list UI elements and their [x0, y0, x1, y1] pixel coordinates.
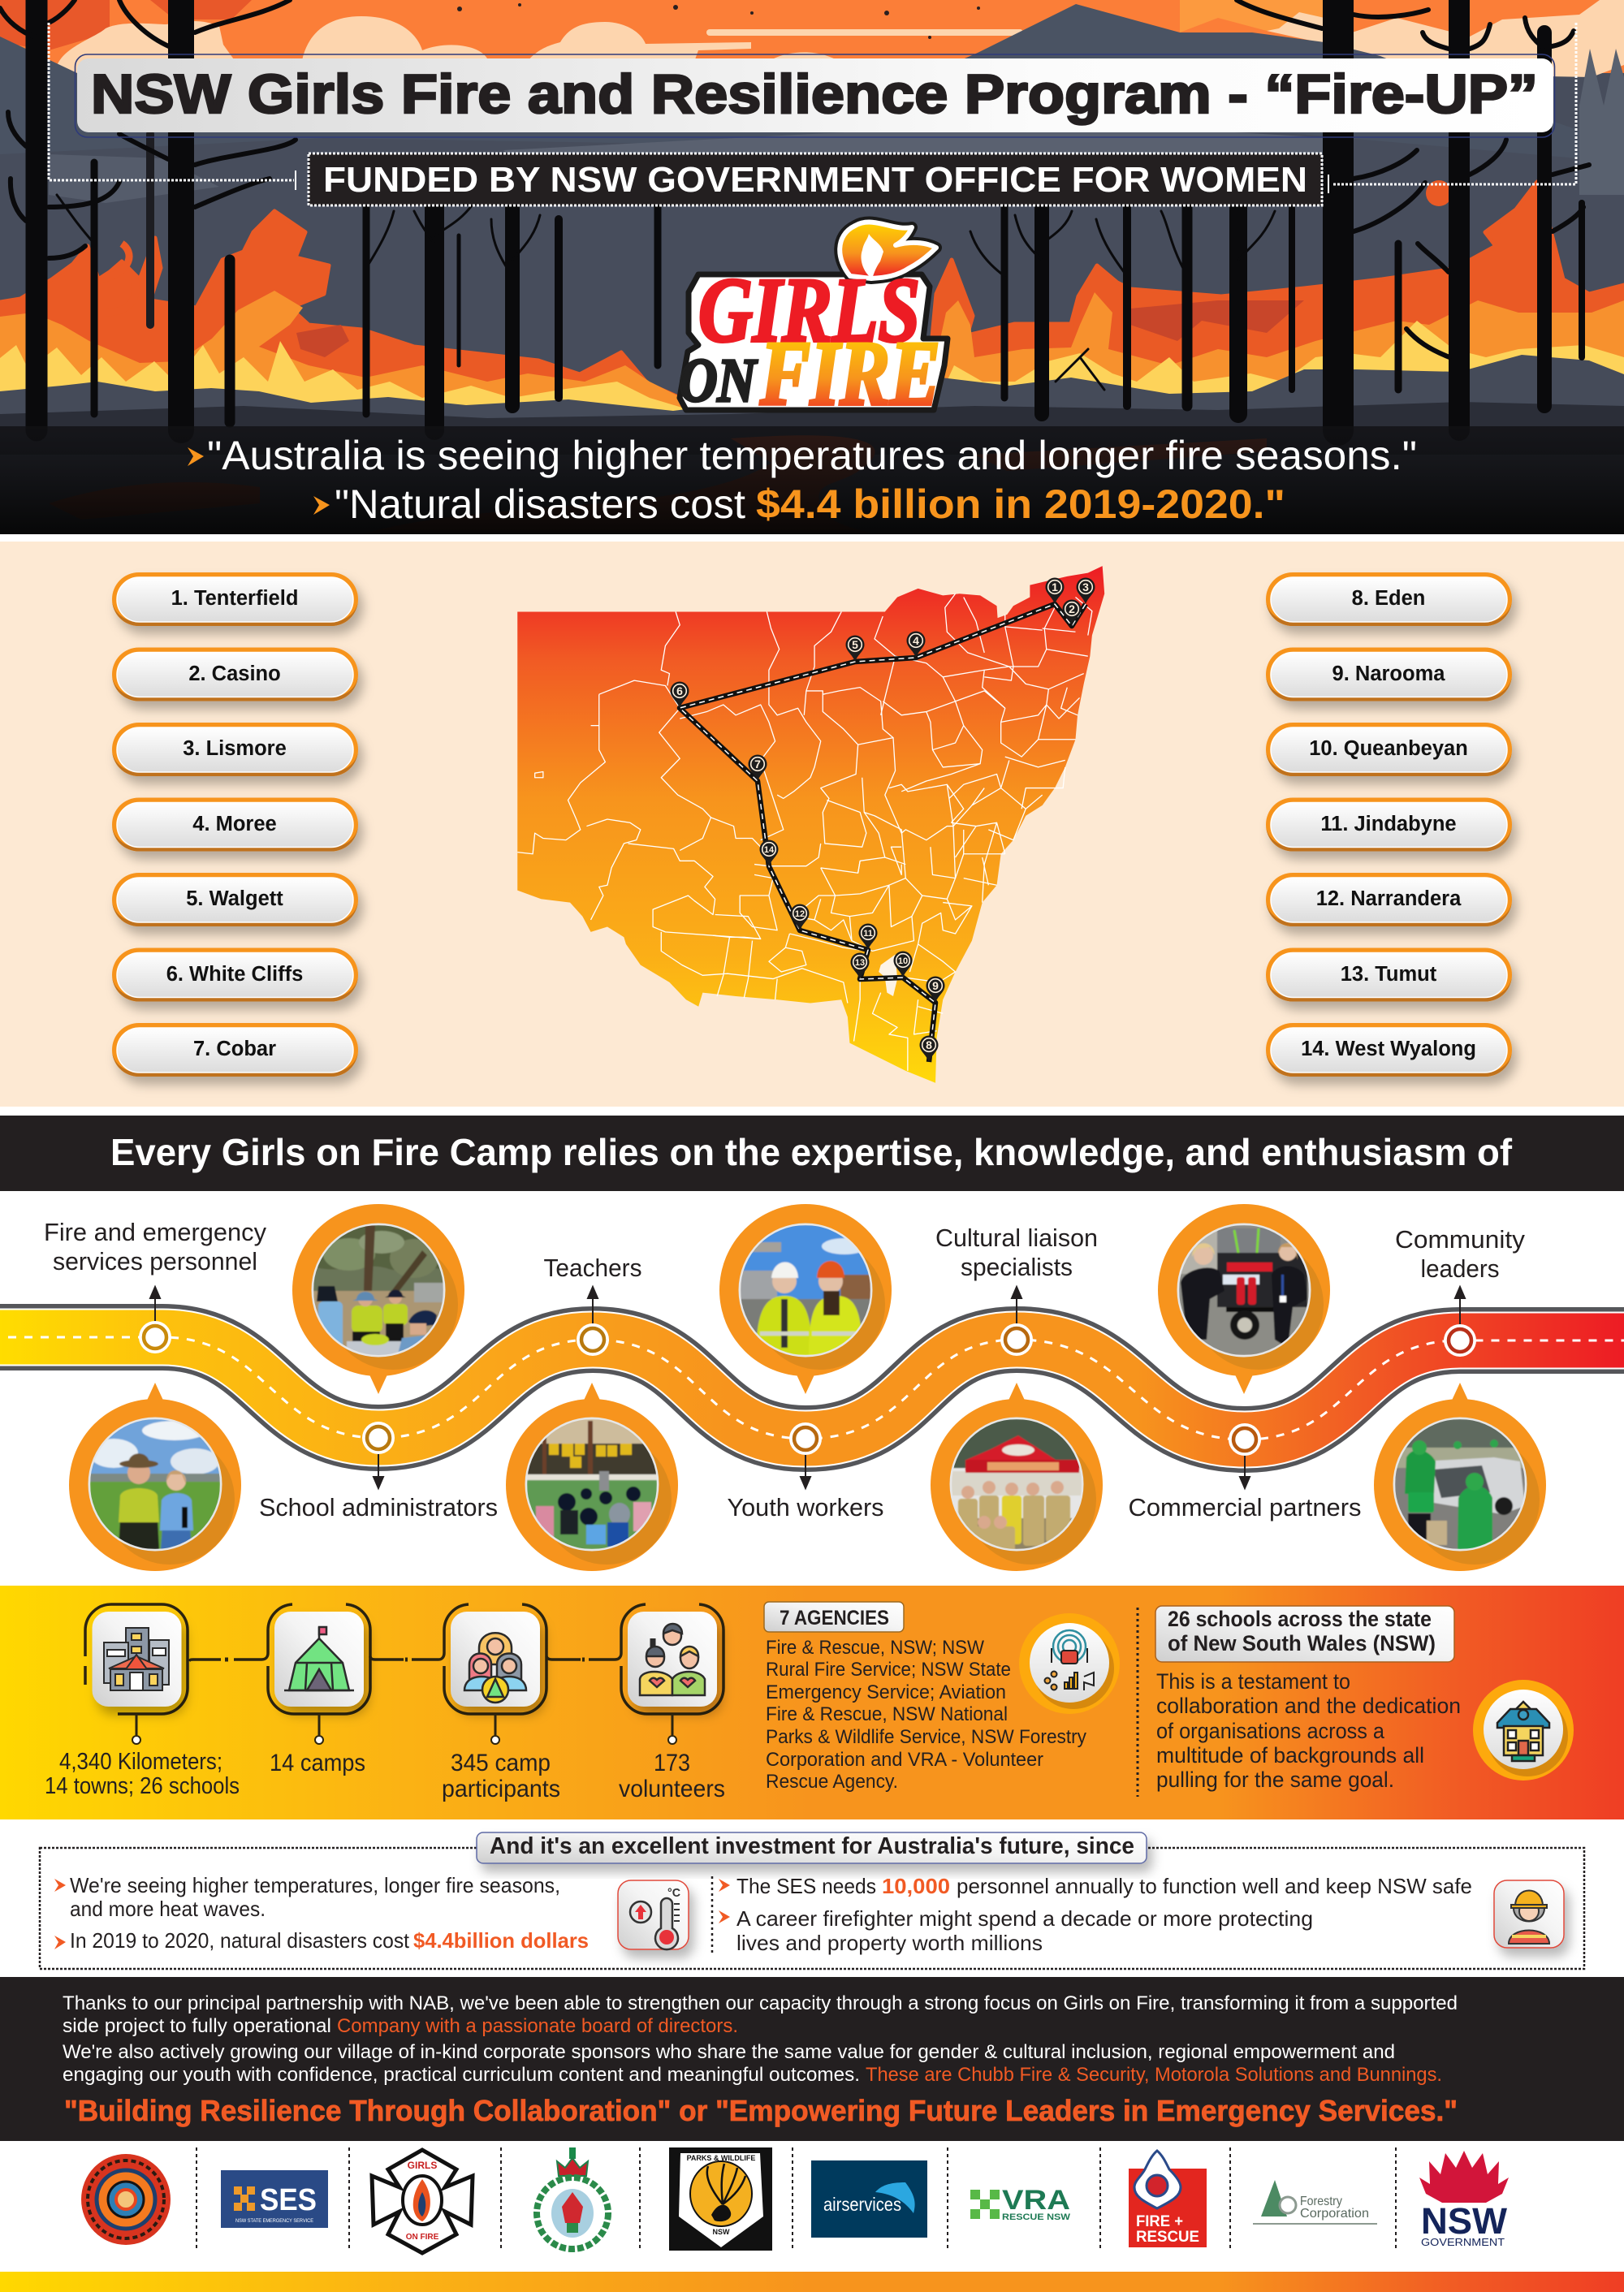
label: school administrators: School administrators [259, 1493, 498, 1522]
pin 4 [906, 632, 926, 658]
schools paragraph: pulling for the same goal. [1156, 1768, 1394, 1792]
pill: Queanbeyan: 10. Queanbeyan [1309, 737, 1468, 760]
pin 8 [919, 1036, 939, 1062]
caption line 1: "Australia is seeing higher temperatures and longer fire seasons." [207, 433, 1417, 478]
sky [0, 0, 1624, 73]
label: camps: 14 camps [270, 1750, 365, 1776]
label: participants count: 345 camp [451, 1750, 551, 1776]
logo: SES: SES [260, 2183, 317, 2217]
icon: school [1473, 1680, 1574, 1781]
partnership panel [0, 1977, 1624, 2141]
photo pin: two people on oval [69, 1383, 241, 1571]
agencies list: Rescue Agency. [766, 1771, 898, 1793]
investment text right [719, 1874, 1472, 1955]
partnership paragraph 1: Thanks to our principal partnership with NAB, we've been able to strengthen our capacity through a strong focus on Girls on Fire, transforming it from a supported [63, 1992, 1458, 2014]
pill: West Wyalong: 14. West Wyalong [1301, 1038, 1476, 1060]
icon: thermometer: °C [667, 1886, 680, 1900]
logo word ON: ON [679, 347, 758, 415]
pin 1 [1046, 578, 1064, 604]
spruce trees right [1579, 49, 1624, 195]
bullet [54, 1936, 66, 1949]
NSW map with tour route [517, 566, 1104, 1083]
icon: firefighter [1494, 1880, 1564, 1948]
caption line 2: "Natural disasters cost [335, 481, 745, 527]
logo: VRA rescue [970, 2185, 1071, 2222]
river of embers [86, 435, 1267, 494]
bullet [719, 1879, 730, 1892]
label: volunteers: volunteers [619, 1776, 725, 1802]
caption line 2: $4.4 billion in 2019-2020." [756, 481, 1285, 527]
pill: Moree: 4. Moree [192, 813, 277, 835]
pin 9: 9 [932, 979, 939, 992]
pin 8: 8 [926, 1038, 932, 1051]
paragraph 1 line 2: side project to fully operational [63, 2015, 331, 2037]
label line 2: services personnel [53, 1247, 257, 1275]
pill: Tenterfield: 1. Tenterfield [171, 587, 298, 610]
logo dividers [197, 2147, 1396, 2251]
icon: city buildings [104, 1628, 169, 1690]
pill: Lismore: 3. Lismore [183, 737, 287, 760]
logo: rural fire service [537, 2147, 608, 2249]
icon: communication [1019, 1613, 1120, 1714]
winding road [0, 1337, 1624, 1440]
pill: Jindabyne [1266, 797, 1512, 851]
schools label: of New South Wales (NSW) [1168, 1631, 1436, 1655]
highlight: company: Company with a passionate board of directors. [337, 2015, 738, 2037]
pill: Narooma: 9. Narooma [1332, 663, 1445, 685]
label: teachers: Teachers [544, 1254, 641, 1282]
agencies list: Parks & Wildlife Service, NSW Forestry [766, 1726, 1086, 1748]
logo: national parks: NSW [713, 2228, 730, 2236]
pin 5: 5 [852, 638, 858, 651]
title banner [75, 54, 1554, 137]
agencies list: Rural Fire Service; NSW State [766, 1659, 1011, 1681]
pin 14 [760, 840, 778, 866]
pill: White Cliffs: 6. White Cliffs [166, 963, 303, 986]
pill: Walgett [112, 873, 358, 926]
pin 4: 4 [913, 634, 919, 647]
stem [318, 1714, 320, 1735]
stem [135, 1714, 138, 1735]
label: fire and emergency services personnel: Fire and emergency [44, 1218, 266, 1246]
logo: fire and rescue: RESCUE [1136, 2229, 1199, 2246]
pill: West Wyalong [1266, 1023, 1512, 1077]
stat: kilometers [45, 1604, 240, 1799]
pill: Tenterfield [112, 572, 358, 626]
label line 2: specialists [961, 1253, 1073, 1281]
stem dot [315, 1736, 323, 1744]
road waypoint markers [139, 1321, 1476, 1456]
pin 2: 2 [1069, 602, 1075, 615]
highlight: 10,000: 10,000 [882, 1874, 950, 1898]
stats band [0, 1586, 1624, 1819]
pill: Tumut: 13. Tumut [1341, 963, 1437, 986]
bullet [719, 1910, 730, 1923]
stat: volunteers [619, 1604, 725, 1802]
schools paragraph: multitude of backgrounds all [1156, 1743, 1424, 1768]
schools paragraph: collaboration and the dedication [1156, 1694, 1461, 1718]
logo outline plate [680, 274, 948, 410]
point: SES personnel: The SES needs [736, 1874, 876, 1898]
stat connectors [189, 1653, 621, 1661]
funding subtitle box: FUNDED BY NSW GOVERNMENT OFFICE FOR WOMEN [323, 160, 1307, 200]
agencies label [764, 1602, 904, 1632]
pill: Eden [1266, 572, 1512, 626]
point continued: and more heat waves. [70, 1897, 266, 1921]
caption line 2 [313, 481, 1285, 527]
logo: forestry corporation: Corporation [1300, 2207, 1369, 2221]
logo: VRA rescue: RESCUE NSW [1002, 2212, 1071, 2222]
dark caption band [0, 426, 1624, 534]
label: kilometers: 4,340 Kilometers; [59, 1749, 222, 1775]
label line 2: leaders [1421, 1254, 1499, 1283]
photo pin: two women with trailer [1158, 1204, 1330, 1394]
label: volunteers count: 173 [654, 1750, 690, 1776]
paragraph 2 line 2: engaging our youth with confidence, practical curriculum content and meaningful outcomes. [63, 2064, 860, 2086]
schools label: 26 schools across the state [1168, 1607, 1432, 1631]
pill: Cobar: 7. Cobar [193, 1038, 276, 1060]
schools paragraph: of organisations across a [1156, 1719, 1385, 1743]
highlight: sponsors: These are Chubb Fire & Security, Motorola Solutions and Bunnings. [866, 2064, 1442, 2086]
label: cultural liaison specialists: Cultural liaison [935, 1224, 1098, 1252]
pin 12: 12 [795, 909, 805, 919]
ground [0, 355, 1624, 418]
agencies list: Fire & Rescue, NSW National [766, 1703, 1008, 1725]
stem dot [491, 1736, 499, 1744]
logo: national parks: PARKS & WILDLIFE [687, 2154, 755, 2162]
pin 6 [671, 682, 689, 708]
tour route line [680, 604, 1086, 1062]
point continued: lives and property worth millions [736, 1931, 1043, 1955]
closing slogan: "Building Resilience Through Collaboration" or "Empowering Future Leaders in Emergency Services." [64, 2094, 1458, 2127]
pin 6: 6 [676, 684, 683, 697]
pin 9 [926, 976, 945, 1003]
pill: White Cliffs [112, 948, 358, 1002]
agencies list: Fire & Rescue, NSW; NSW [766, 1637, 984, 1659]
investment text left [54, 1873, 589, 1953]
pin 2 [1062, 599, 1082, 626]
location pins [671, 578, 1095, 1062]
birds [457, 3, 980, 39]
pill: Moree [112, 797, 358, 851]
pin 3: 3 [1082, 581, 1089, 594]
Girls on Fire logo [679, 222, 948, 425]
pin 11: 11 [863, 929, 873, 939]
pill: Casino [112, 648, 358, 701]
logo: forestry corporation: Forestry [1300, 2195, 1342, 2208]
flames: back layer [0, 180, 1624, 422]
photo pin: group under red gazebo [931, 1383, 1103, 1571]
point: disaster cost: In 2019 to 2020, natural disasters cost [70, 1928, 410, 1953]
map section background [0, 542, 1624, 1107]
logo: Girls on Fire cross [372, 2150, 473, 2253]
stat: camps [268, 1604, 370, 1776]
photo pin: rescue crew at crashed car [1374, 1383, 1546, 1571]
partnership paragraph 2: We're also actively growing our village of in-kind corporate sponsors who share the same value for gender & cultural inclusion, regional empowerment and [63, 2041, 1395, 2063]
schools paragraph: This is a testament to [1156, 1669, 1350, 1694]
logo: fire and rescue: FIRE + [1136, 2213, 1183, 2230]
logo: VRA rescue: VRA [1002, 2185, 1070, 2216]
logo: SES [221, 2170, 328, 2228]
pin 7 [749, 755, 767, 781]
pill: Narrandera [1266, 873, 1512, 926]
pin 11 [859, 924, 877, 950]
icon: thermometer [618, 1880, 689, 1949]
label: youth workers: Youth workers [728, 1493, 883, 1522]
logo: NSW government: GOVERNMENT [1421, 2236, 1505, 2248]
photo pin: assembled school students [506, 1383, 678, 1571]
mountains [0, 4, 1387, 73]
logo word GIRLS: GIRLS [698, 260, 920, 361]
dotted frame around title [49, 23, 1576, 193]
clouds [55, 0, 1624, 77]
logo: airservices: airservices [823, 2194, 901, 2215]
schools label [1155, 1606, 1454, 1662]
pill: Walgett: 5. Walgett [186, 887, 283, 910]
pin 13: 13 [855, 958, 865, 968]
pill: Cobar [112, 1023, 358, 1077]
label: towns and schools: 14 towns; 26 schools [45, 1773, 240, 1799]
pill: Tumut [1266, 948, 1512, 1002]
title banner: NSW Girls Fire and Resilience Program - “Fire-UP” [91, 63, 1538, 125]
pin 14: 14 [764, 845, 775, 855]
pill: Narrandera: 12. Narrandera [1316, 887, 1462, 910]
26 schools panel [1155, 1606, 1574, 1792]
section heading: every camp relies on [0, 1116, 1624, 1191]
logo: SES: NSW STATE EMERGENCY SERVICE [235, 2219, 313, 2224]
logo: national parks [669, 2147, 772, 2251]
stem [494, 1714, 497, 1735]
stem dot [668, 1736, 676, 1744]
pin 1: 1 [1052, 581, 1058, 594]
footer gradient band [0, 2272, 1624, 2292]
logo: indigenous artwork [81, 2154, 171, 2245]
pin 10 [893, 952, 913, 978]
pin 5 [846, 635, 864, 662]
label: participants: participants [442, 1776, 560, 1802]
section heading: every camp relies on: Every Girls on Fire Camp relies on the expertise, knowledge, and enthusiasm of [110, 1131, 1513, 1173]
highlight: cost amount: $4.4billion dollars [413, 1928, 589, 1953]
bullet [54, 1879, 66, 1892]
7 agencies panel [764, 1602, 1120, 1793]
agencies list: Emergency Service; Aviation [766, 1681, 1006, 1703]
pin 13 [851, 953, 869, 979]
logo word FIRE: FIRE [759, 323, 940, 425]
road labels [44, 1218, 1526, 1522]
icon: volunteers group [640, 1624, 705, 1695]
label: commercial partners: Commercial partners [1129, 1493, 1361, 1522]
stat: participants [442, 1604, 560, 1802]
stem [671, 1714, 674, 1735]
pill: Lismore [112, 723, 358, 776]
header: bushfire illustration banner [0, 0, 1624, 536]
logo: NSW government: NSW [1421, 2200, 1508, 2242]
point continued: personnel annually to function well and keep NSW safe [957, 1874, 1472, 1898]
icon: tent [284, 1627, 354, 1690]
pill: Casino: 2. Casino [188, 663, 281, 685]
label: community leaders: Community [1395, 1225, 1526, 1254]
point: career firefighter: A career firefighter might spend a decade or more protecting [736, 1906, 1313, 1931]
pin 12 [791, 904, 809, 930]
map shape and council boundaries [517, 566, 1104, 1083]
dotted divider [1137, 1608, 1138, 1797]
photo pin: team seated under trees [292, 1204, 464, 1394]
pill: Eden: 8. Eden [1352, 587, 1425, 610]
pin 10: 10 [898, 956, 908, 966]
road arrows [150, 1287, 1465, 1488]
agencies list [766, 1637, 1086, 1793]
pin 7: 7 [754, 758, 761, 770]
list of towns left [112, 572, 358, 1077]
agencies label: 7 AGENCIES [780, 1607, 889, 1629]
photo pin: two girls in hi-vis [719, 1204, 892, 1394]
logo: airservices [811, 2160, 927, 2238]
logo: Girls on Fire cross: GIRLS [408, 2160, 437, 2171]
investment divider [711, 1876, 713, 1956]
schools paragraph [1156, 1669, 1461, 1792]
agencies list: Corporation and VRA - Volunteer [766, 1749, 1043, 1771]
pin 3 [1077, 578, 1095, 604]
logo: forestry corporation [1253, 2180, 1377, 2224]
pill: Queanbeyan [1266, 723, 1512, 776]
point: higher temperatures: We're seeing higher temperatures, longer fire seasons, [70, 1873, 560, 1897]
stem dot [132, 1736, 140, 1744]
logo: Girls on Fire cross: ON FIRE [406, 2233, 439, 2242]
list of towns right [1266, 572, 1512, 1077]
investment section frame [40, 1848, 1584, 1969]
pill: Narooma [1266, 648, 1512, 701]
investment heading: And it's an excellent investment for Australia's future, since [490, 1833, 1134, 1859]
pill: Jindabyne: 11. Jindabyne [1320, 813, 1457, 835]
logo flame [840, 222, 936, 278]
logo: fire and rescue [1129, 2151, 1207, 2247]
tree trunks [0, 0, 1589, 430]
icon: three girls and tent badge [464, 1633, 526, 1703]
logo: NSW government [1419, 2151, 1509, 2248]
